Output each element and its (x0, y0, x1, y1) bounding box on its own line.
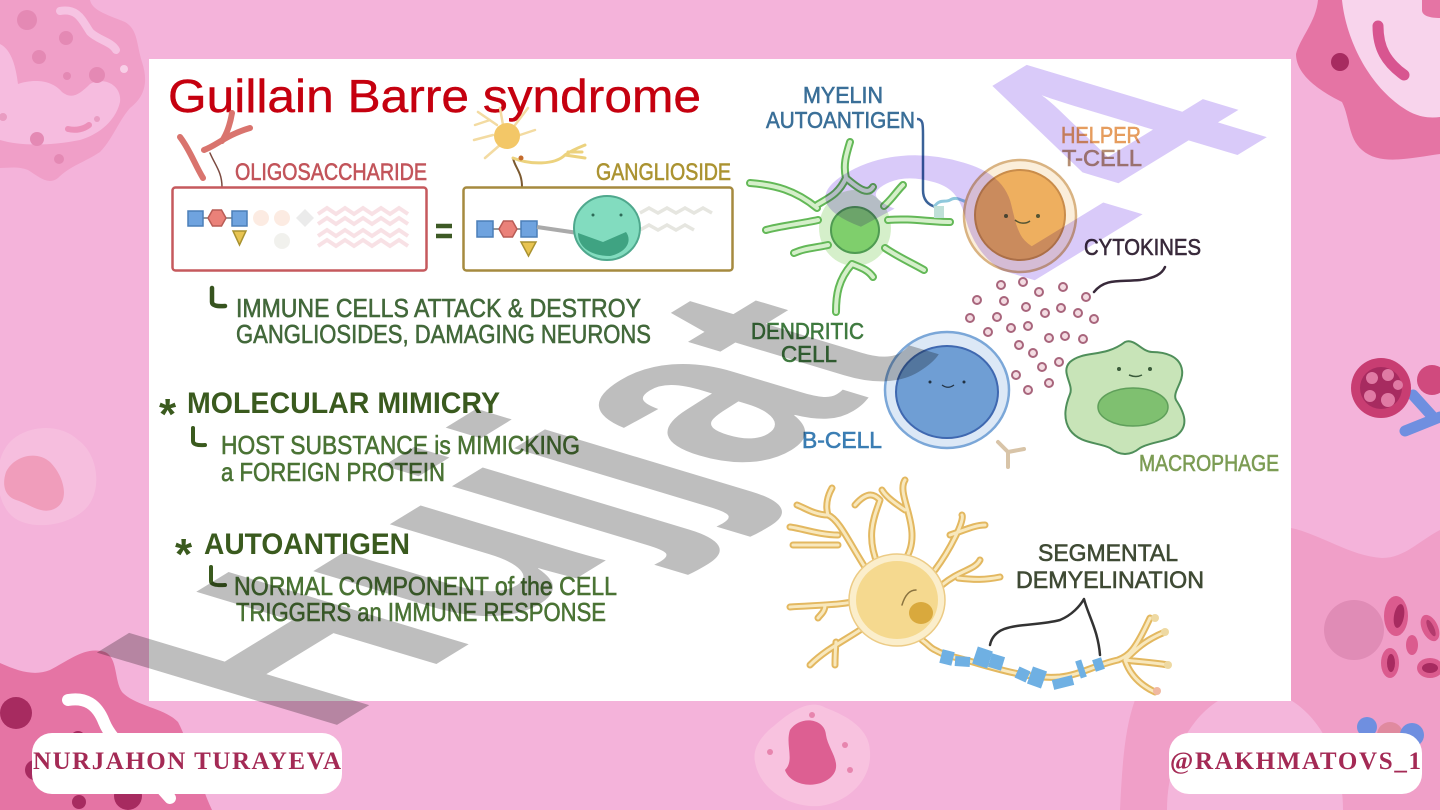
icon: dendritic cell (750, 142, 950, 312)
label: myelin autoantigen: AUTOANTIGEN (766, 107, 915, 133)
antibody link (537, 227, 578, 233)
label: segmental demyelination: DEMYELINATION (1016, 567, 1204, 594)
icon: antibody (998, 442, 1024, 467)
text block: molecular mimicry: a FOREIGN PROTEIN (221, 457, 445, 487)
callout: immune attack: IMMUNE CELLS ATTACK & DESTROY (236, 293, 641, 323)
icon: yellow neuron (474, 108, 585, 187)
equals sign (436, 226, 452, 236)
label: myelin autoantigen (766, 82, 936, 207)
icon: red dendrite (180, 113, 250, 187)
label: helper T-cell: HELPER (1061, 122, 1141, 148)
panel: white slide (149, 59, 1291, 701)
text block: autoantigen: TRIGGERS an IMMUNE RESPONSE (236, 597, 606, 627)
label: cytokines: CYTOKINES (1084, 234, 1201, 260)
callout: immune attack (212, 288, 651, 349)
author pill: left (32, 733, 342, 794)
label: segmental demyelination (990, 540, 1204, 655)
sugar chain (477, 221, 537, 256)
label: dendritic cell: DENDRITIC (751, 318, 864, 344)
label: dendritic cell (751, 318, 864, 367)
decorative cell: left middle (0, 428, 96, 525)
sugar chain (188, 210, 247, 245)
label: helper T-cell (1061, 122, 1142, 171)
watermark: Hujjat (7, 259, 1021, 757)
text block: molecular mimicry: * (159, 390, 177, 439)
box (464, 188, 732, 270)
cytokine dots (966, 278, 1098, 394)
label: macrophage: MACROPHAGE (1139, 450, 1279, 476)
watermark: 2 (712, 114, 1226, 307)
title: Guillain Barre syndrome (168, 70, 701, 122)
faded waves (640, 208, 712, 230)
decorative cell: bottom centre (754, 705, 870, 806)
icon: teal immune cell (574, 196, 640, 260)
decorative cell: top right (1296, 0, 1440, 160)
icon: helper T-cell (964, 160, 1076, 272)
label: oligosaccharide: OLIGOSACCHARIDE (235, 159, 427, 186)
text block: autoantigen: AUTOANTIGEN (204, 528, 410, 561)
watermark: 4 (849, 28, 1365, 222)
label: helper T-cell: T-CELL (1062, 145, 1142, 171)
icon: neuron (790, 480, 1172, 695)
decorative red blood cells: right (1381, 596, 1440, 678)
author pill: left: NURJAHON TURAYEVA (33, 748, 341, 775)
label: cytokines (1084, 234, 1201, 292)
callout: immune attack: GANGLIOSIDES, DAMAGING NEURONS (236, 319, 651, 349)
label: B-cell: B-CELL (802, 427, 882, 453)
decorative cell: top left (0, 0, 145, 181)
label: dendritic cell: CELL (781, 341, 837, 367)
decorative cell: bottom left (0, 651, 212, 810)
icon: myelin autoantigen molecule (934, 198, 972, 218)
box (172, 188, 426, 270)
label: segmental demyelination: SEGMENTAL (1038, 540, 1178, 567)
decorative wave: lower right (1120, 528, 1440, 810)
label: myelin autoantigen: MYELIN (803, 82, 883, 108)
decorative bacteria: bottom right (1357, 717, 1424, 748)
decorative bacteria cluster: right (1351, 358, 1440, 431)
text block: autoantigen (175, 528, 617, 627)
faded lipid tail (253, 208, 408, 249)
author pill: right (1169, 733, 1422, 794)
label: ganglioside: GANGLIOSIDE (596, 159, 731, 186)
text block: autoantigen: * (175, 530, 193, 579)
panel: oligosaccharide (172, 113, 427, 270)
icon: macrophage (1065, 341, 1184, 454)
icon: B-cell (885, 332, 1009, 448)
text block: molecular mimicry: HOST SUBSTANCE is MIMICKING (221, 430, 580, 460)
text block: molecular mimicry (159, 387, 580, 487)
panel: ganglioside (464, 108, 732, 270)
text block: molecular mimicry: MOLECULAR MIMICRY (187, 387, 500, 420)
text block: autoantigen: NORMAL COMPONENT of the CELL (234, 571, 617, 601)
author pill: right: @RAKHMATOVS_1 (1170, 748, 1421, 775)
